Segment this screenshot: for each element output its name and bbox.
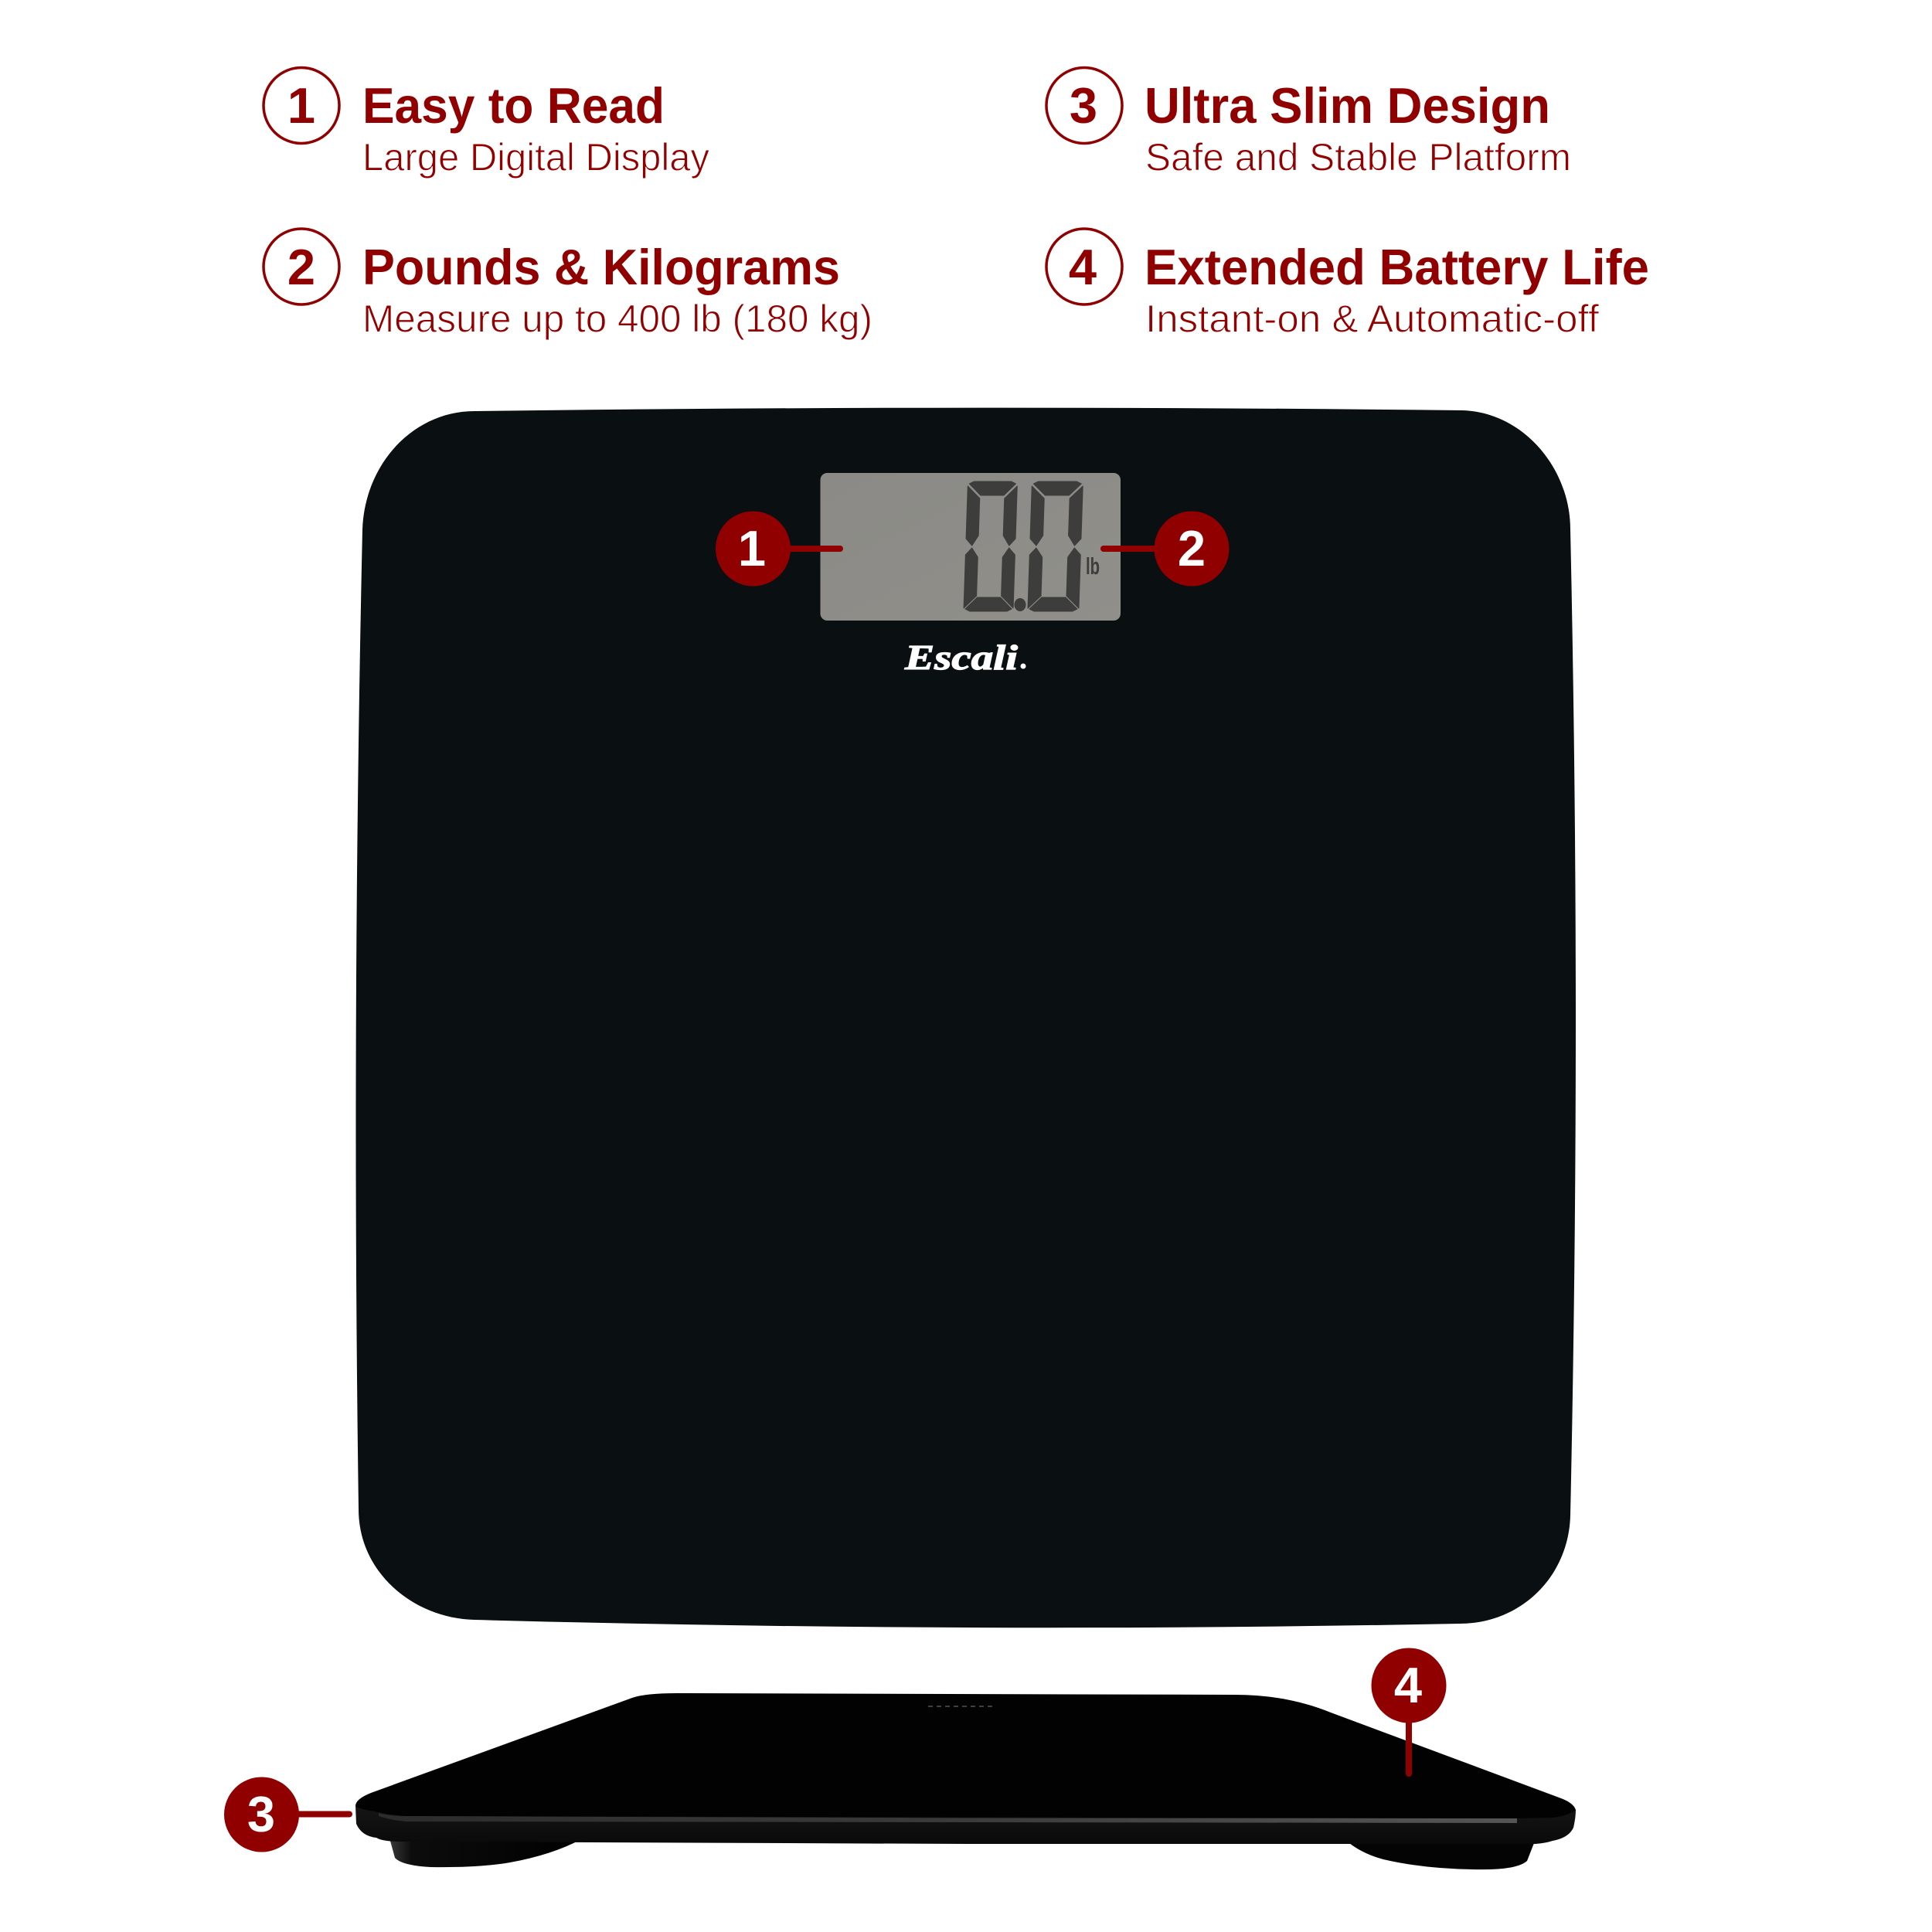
left foot	[389, 1835, 581, 1867]
feature 2: pounds and kilograms	[264, 229, 872, 340]
highlight strip	[379, 1813, 1517, 1823]
scale top view	[355, 408, 1576, 1628]
scale platform	[355, 408, 1576, 1628]
feature 3: ultra slim design	[1046, 68, 1571, 179]
callout 1: 1	[738, 520, 766, 577]
feature 1: easy to read	[264, 68, 709, 179]
heading: easy to read: Easy to Read	[362, 77, 665, 134]
callout 4: 4	[1394, 1657, 1422, 1713]
scale side view	[355, 1693, 1576, 1869]
icon: number 3 outline circle: 3	[1070, 77, 1097, 134]
callout 2	[1104, 512, 1229, 586]
callout 2: 2	[1178, 520, 1206, 577]
heading: ultra slim design: Ultra Slim Design	[1145, 77, 1550, 134]
icon: number 3 outline circle	[1046, 68, 1122, 144]
icon: number 1 outline circle: 1	[287, 77, 315, 134]
faint logo on side view	[928, 1706, 995, 1707]
icon: number 1 outline circle	[264, 68, 339, 144]
feature 4: extended battery life	[1046, 229, 1649, 340]
text: safe and stable platform: Safe and Stable Platform	[1145, 136, 1571, 179]
callout 3: 3	[247, 1786, 275, 1842]
LCD decimal point	[1014, 598, 1026, 611]
text: instant-on and automatic-off: Instant-on & Automatic-off	[1145, 297, 1599, 340]
top glass surface	[355, 1693, 1576, 1818]
heading: pounds and kilograms: Pounds & Kilograms	[362, 239, 840, 295]
text: measure up to 400 lb: Measure up to 400 lb (180 kg)	[362, 297, 872, 340]
LCD digit 0 second	[1028, 481, 1083, 611]
LCD digit 0	[964, 481, 1017, 611]
icon: number 2 outline circle: 2	[287, 239, 315, 295]
callout 1	[716, 512, 840, 586]
heading: extended battery life: Extended Battery Life	[1145, 239, 1649, 295]
icon: number 2 outline circle	[264, 229, 339, 304]
side rim	[355, 1797, 1576, 1844]
text: large digital display: Large Digital Display	[362, 136, 709, 179]
LCD display	[821, 473, 1121, 621]
icon: number 4 outline circle: 4	[1069, 239, 1097, 295]
logo: Escali: Escali	[904, 638, 1018, 677]
icon: number 4 outline circle	[1046, 229, 1122, 304]
callout 4	[1371, 1648, 1447, 1774]
right foot	[1345, 1839, 1536, 1869]
callout 3	[224, 1777, 349, 1852]
LCD unit lb: lb	[1086, 553, 1100, 580]
